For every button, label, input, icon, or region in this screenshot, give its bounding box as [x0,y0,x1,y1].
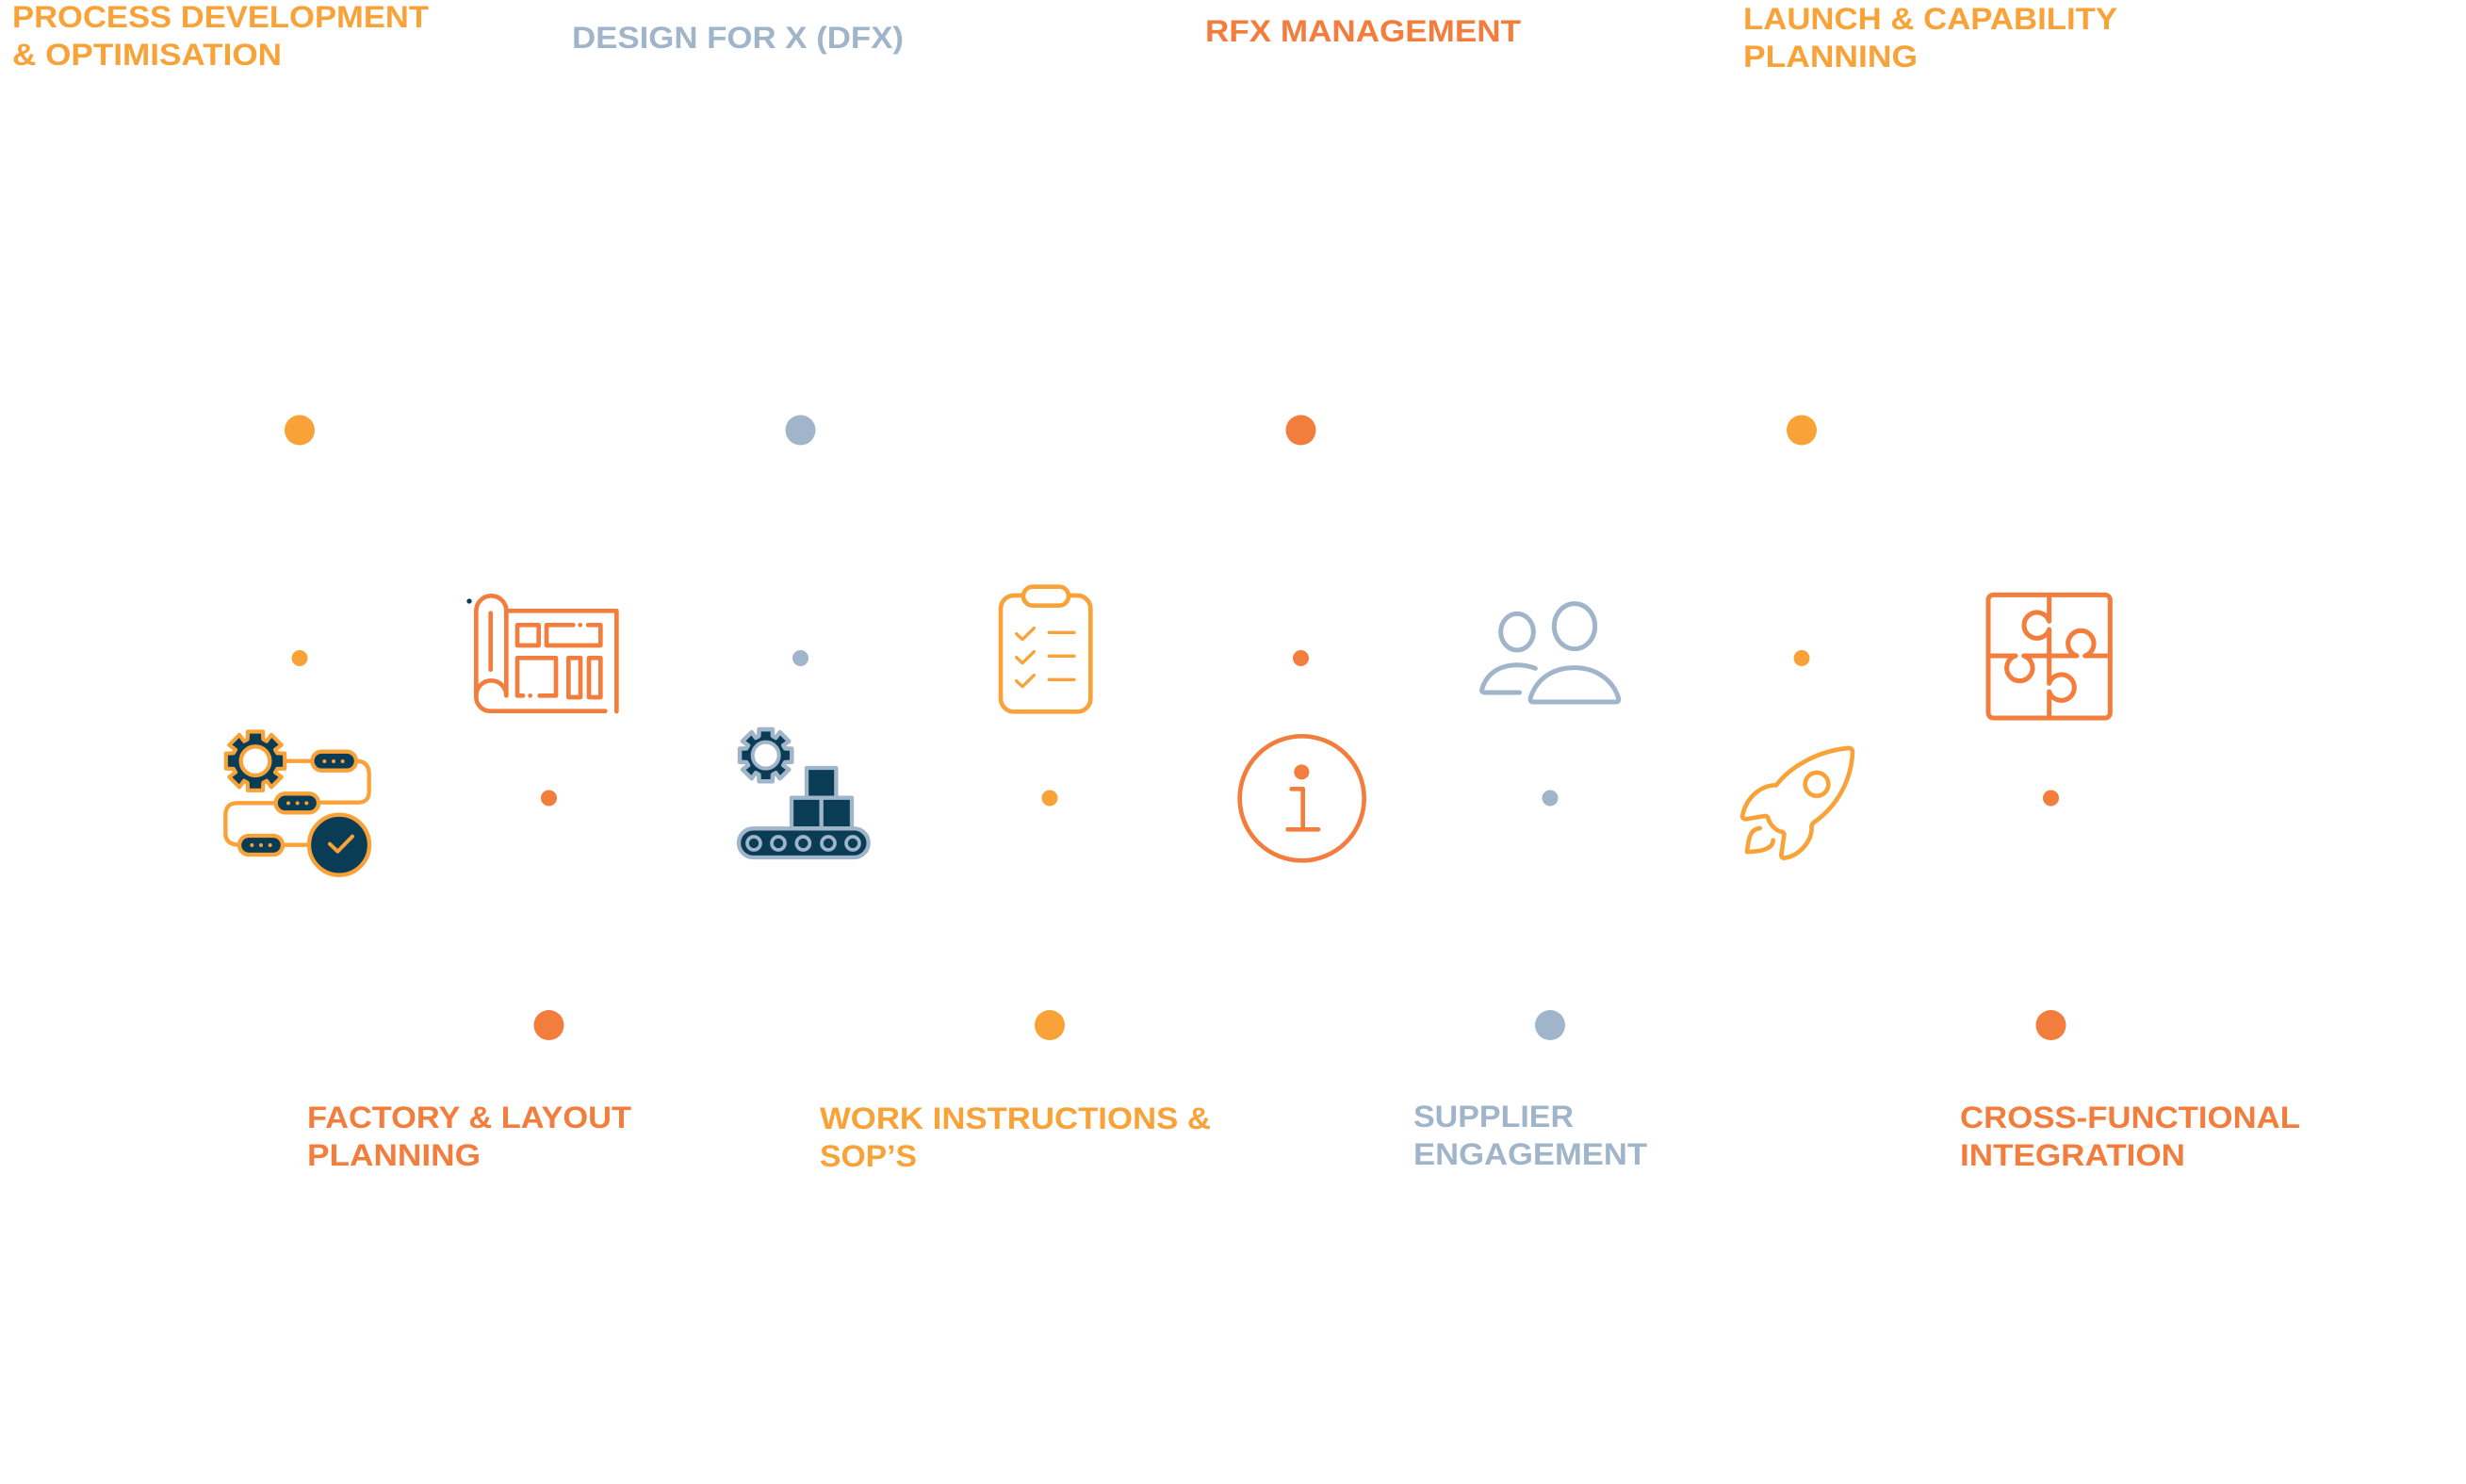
heading: launch and capability planning [1743,2,2117,73]
heading: supplier engagement: SUPPLIER [1413,1100,1574,1133]
timeline dots: small lower row [541,790,2059,807]
heading: factory and layout planning [307,1101,631,1172]
timeline dots: large bottom row [533,1010,2066,1040]
heading: cross-functional integration: CROSS-FUNCTIONAL [1960,1101,2300,1134]
timeline dots: small upper row [292,650,1809,666]
heading: design for x: DESIGN FOR X (DFX) [572,21,904,55]
icon: clipboard checklist [1001,587,1090,711]
heading: work instructions and SOPs [820,1101,1211,1173]
heading: work instructions and SOPs: WORK INSTRUCTIONS & [820,1101,1211,1135]
timeline dots: large top row [285,415,1817,445]
icon: puzzle pieces [1988,595,2110,718]
icon: two people [1482,604,1619,702]
icon: information circle [1240,736,1364,860]
heading: process development and optimisation [12,0,429,72]
heading: cross-functional integration: INTEGRATION [1960,1138,2185,1172]
heading: process development and optimisation: & OPTIMISATION [12,38,282,72]
icon: blueprint floor plan [466,595,616,711]
heading: factory and layout planning: PLANNING [307,1138,481,1172]
heading: launch and capability planning: LAUNCH & CAPABILITY [1743,2,2117,36]
heading: supplier engagement: ENGAGEMENT [1413,1137,1647,1171]
heading: factory and layout planning: FACTORY & LAYOUT [307,1101,631,1134]
heading: supplier engagement [1413,1100,1647,1171]
icon: rocket [1742,748,1853,858]
heading: process development and optimisation: PROCESS DEVELOPMENT [12,0,429,34]
icon: gear and boxes on conveyor [739,729,869,857]
heading: rfx management: RFX MANAGEMENT [1205,14,1521,48]
heading: cross-functional integration [1960,1101,2300,1172]
heading: work instructions and SOPs: SOP’S [820,1139,917,1173]
icon: process gear flow with check [225,731,369,875]
heading: launch and capability planning: PLANNING [1743,40,1918,73]
